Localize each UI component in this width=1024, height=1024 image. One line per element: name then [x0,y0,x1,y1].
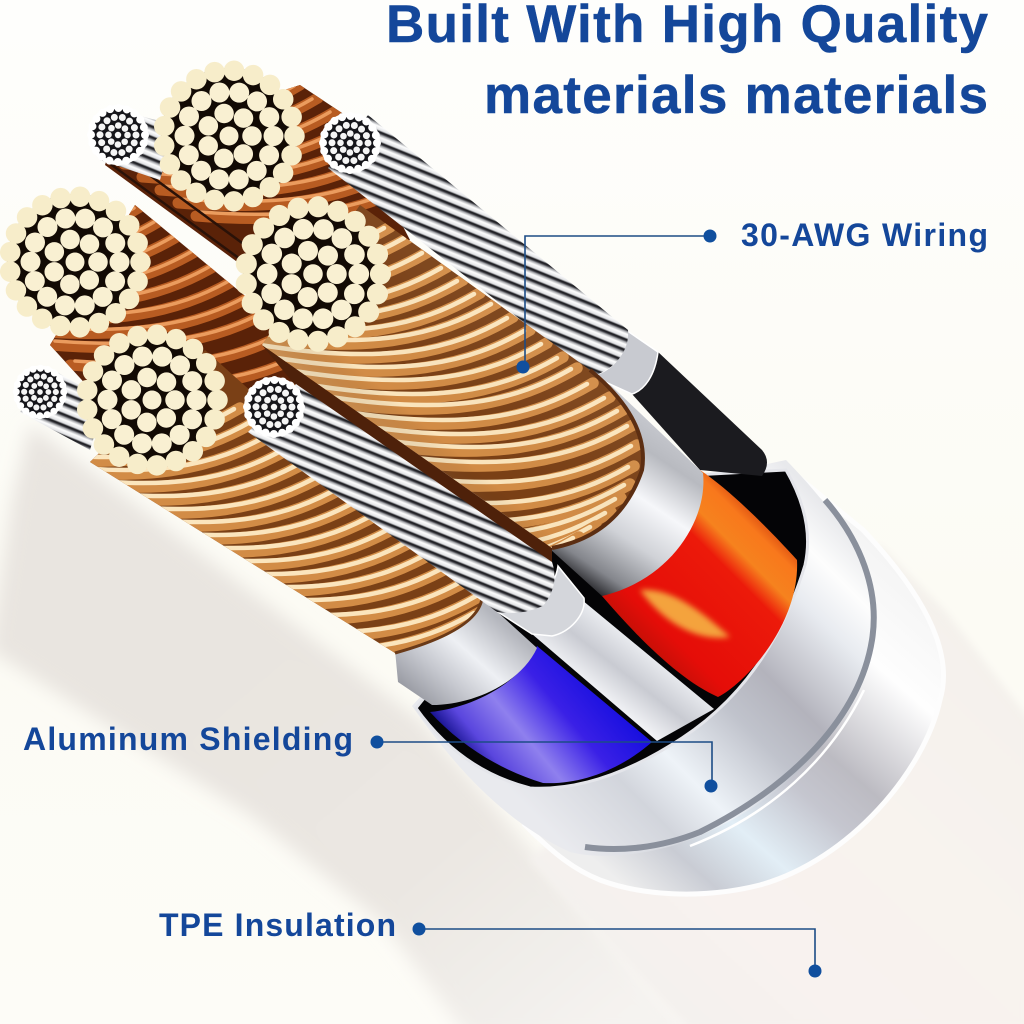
title [386,0,989,125]
callout: 30-AWG Wiring [516,217,988,374]
title: materials materials [484,66,988,125]
dark copper strand: left back [50,205,386,432]
copper strand: lower [90,350,483,654]
dark gap between strands [262,345,552,566]
silver core: blue wire [395,598,537,705]
callout: Aluminum Shielding: Aluminum Shielding [23,721,353,757]
small silver strands behind [20,112,175,450]
blue wire [430,646,652,783]
soft beige background shape [0,425,700,1024]
copper strand: main upper [262,205,645,550]
wire end caps: thin [14,105,380,437]
callout: TPE Insulation: TPE Insulation [159,907,396,943]
cut-away opening [416,470,808,788]
silver collar: central strand [498,566,584,636]
dark copper strand: upper back [105,85,410,262]
outer TPE sheath [525,470,943,894]
silver strand: upper [328,115,628,376]
silver strand: central [248,384,555,613]
silver core: central wire [532,600,714,741]
silver aluminum shielding ring [412,460,876,856]
callout: TPE Insulation [159,907,822,978]
callout: Aluminum Shielding [23,721,718,792]
black wire [632,351,767,476]
silver core: red wire [540,375,703,596]
wire end caps: thick copper [7,68,383,468]
silver collar: upper strand [592,330,658,394]
red wire [602,470,797,697]
white outer cable body [530,545,1024,1024]
callout: 30-AWG Wiring: 30-AWG Wiring [741,217,988,253]
